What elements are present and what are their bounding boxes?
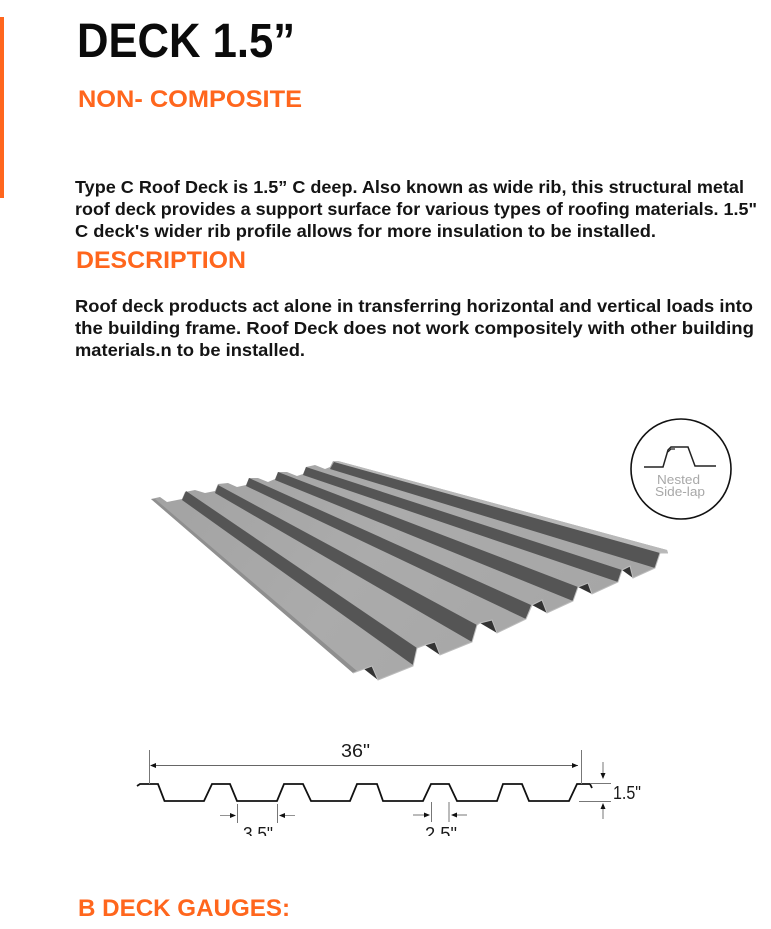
deck profile dimension drawing — [136, 744, 640, 836]
intro text block: C deck's wider rib profile allows for more insulation to be installed. — [75, 221, 656, 241]
description text block: Roof deck products act alone in transferring horizontal and vertical loads into — [75, 296, 753, 316]
icon: nested side-lap profile — [644, 447, 716, 467]
dimension: 3.5 inch flat — [220, 804, 295, 836]
dimension: 1.5 inch height: 1.5" — [613, 783, 641, 803]
nested side-lap callout — [631, 419, 731, 519]
intro text block: Type C Roof Deck is 1.5” C deep. Also known as wide rib, this structural metal — [75, 177, 744, 197]
dimension: 36 inch width — [150, 741, 582, 784]
description heading: DESCRIPTION — [76, 247, 246, 274]
dimension: 2.5 inch rib: 2.5" — [425, 824, 457, 844]
accent bar — [0, 17, 4, 198]
description text block: the building frame. Roof Deck does not work compositely with other building — [75, 318, 754, 338]
description text block: materials.n to be installed. — [75, 340, 305, 360]
gauges heading: B DECK GAUGES: — [78, 895, 290, 922]
profile line — [137, 784, 592, 801]
deck panel illustration — [151, 461, 668, 680]
intro text block — [75, 177, 757, 241]
nested side-lap callout: Side-lap — [655, 484, 705, 499]
intro text block: roof deck provides a support surface for various types of roofing materials. 1.5" — [75, 199, 757, 219]
dimension: 2.5 inch rib — [413, 802, 467, 836]
title: DECK 1.5” — [77, 15, 295, 68]
subtitle: NON- COMPOSITE — [78, 86, 302, 113]
nested side-lap callout: Nested — [657, 472, 700, 487]
dimension: 36 inch width: 36" — [341, 741, 370, 761]
dimension: 3.5 inch flat: 3.5" — [243, 824, 273, 844]
dimension: 1.5 inch height — [579, 762, 641, 819]
description text block — [75, 296, 754, 360]
